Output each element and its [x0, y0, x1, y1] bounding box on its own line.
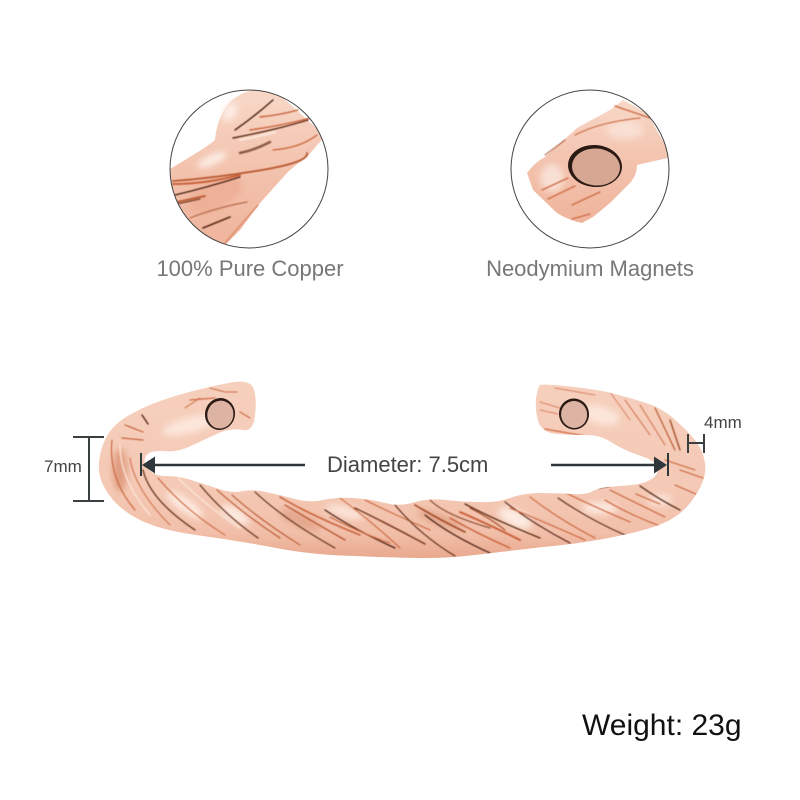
- detail circle: pure copper: [165, 90, 328, 248]
- arrow: diameter right: [551, 453, 668, 476]
- label: 4mm: 4mm: [704, 413, 742, 432]
- label: 100% Pure Copper: 100% Pure Copper: [156, 256, 344, 281]
- magnet: [568, 145, 622, 187]
- arrow: diameter left: [141, 453, 305, 476]
- magnet right: [555, 395, 593, 433]
- dimension: 4mm bracket: [688, 434, 704, 453]
- label: weight: Weight: 23g: [582, 709, 742, 742]
- label: Neodymium Magnets: Neodymium Magnets: [486, 256, 694, 281]
- label: diameter: Diameter: 7.5cm: [327, 452, 488, 477]
- detail circle: magnet: [511, 90, 672, 248]
- right stripes: [530, 497, 595, 538]
- magnet left: [201, 395, 239, 433]
- dimension: 7mm bracket: [73, 437, 104, 501]
- copper cuff bracelet: [90, 375, 715, 565]
- left curve stripes: [111, 440, 135, 510]
- centre stripes: [232, 495, 300, 545]
- label: 7mm: 7mm: [44, 457, 82, 476]
